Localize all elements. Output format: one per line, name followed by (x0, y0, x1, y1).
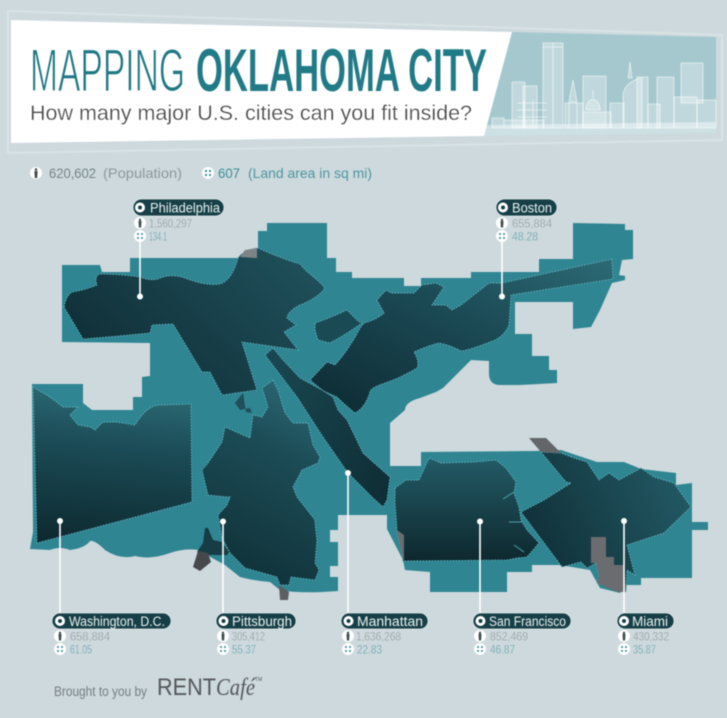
area: 61.05 (70, 642, 92, 656)
population (342, 630, 401, 644)
Oklahoma City outline (30, 223, 708, 593)
population: 852,469 (490, 630, 528, 644)
name pill: Washington, D.C. (69, 614, 165, 629)
name pill: Boston (512, 200, 552, 216)
population value: 620,602 (49, 165, 96, 181)
city: Philadelphia shape (64, 248, 325, 395)
city: Miami shape (521, 438, 691, 592)
area: 55.37 (232, 642, 256, 656)
banner outer frame (8, 11, 722, 153)
area: 22.83 (357, 642, 382, 656)
area (342, 642, 382, 656)
logo: RentCafe (157, 674, 262, 701)
area: 48.28 (512, 230, 538, 244)
pointer line (621, 518, 627, 613)
pointer line (499, 236, 505, 300)
title: OKLAHOMA CITY (196, 37, 487, 104)
callout: Manhattan (341, 470, 428, 656)
city: Boston shape (310, 259, 613, 413)
population: 305,412 (232, 630, 265, 644)
land area caption: (Land area in sq mi) (248, 165, 372, 181)
pointer line (477, 518, 483, 613)
population: 658,884 (70, 630, 110, 644)
title: MAPPING (30, 37, 185, 104)
name pill (341, 613, 428, 629)
logo: RentCafe: TM (255, 677, 262, 683)
skyline panel (484, 32, 716, 136)
callout: Miami (617, 518, 674, 656)
map (30, 223, 708, 600)
population: 655,884 (512, 216, 552, 230)
name pill: Manhattan (357, 614, 423, 629)
pointer line (345, 470, 351, 613)
population caption: (Population) (103, 165, 182, 181)
pointer line (57, 518, 63, 613)
callout: Boston (496, 199, 557, 300)
callout: San Francisco (473, 518, 571, 656)
logo: RentCafe: RENT (157, 674, 216, 701)
logo: RentCafe: Café (216, 675, 256, 701)
land area value: 607 (218, 165, 240, 181)
pointer line (220, 518, 226, 613)
title (30, 37, 487, 104)
area: 35.87 (633, 642, 656, 656)
subtitle: How many major U.S. cities can you fit inside? (30, 101, 472, 125)
name pill: Philadelphia (150, 200, 220, 216)
icon: population (30, 167, 42, 179)
footer credit (54, 674, 262, 701)
callout: Philadelphia (133, 199, 224, 300)
population: 1,560,297 (149, 216, 192, 230)
callout: Pittsburgh (216, 518, 296, 656)
city: Pittsburgh shape (193, 380, 320, 600)
icon: land area (202, 167, 214, 179)
credit text: Brought to you by (54, 684, 147, 699)
population: 430,332 (633, 630, 669, 644)
city: San Francisco shape (395, 458, 539, 561)
population: 1,636,268 (356, 630, 401, 644)
name pill: San Francisco (489, 614, 566, 629)
name pill: Miami (632, 614, 668, 629)
header banner (8, 11, 722, 153)
city: Washington, D.C. shape (33, 387, 192, 543)
area: 46.87 (490, 642, 515, 656)
pointer line (137, 236, 143, 300)
name pill: Pittsburgh (232, 614, 292, 629)
white title panel (11, 20, 512, 143)
area: 134.1 (149, 230, 167, 244)
callout: Washington, D.C. (52, 518, 171, 656)
Oklahoma City stats (30, 165, 372, 181)
city: Manhattan shape (265, 348, 390, 507)
